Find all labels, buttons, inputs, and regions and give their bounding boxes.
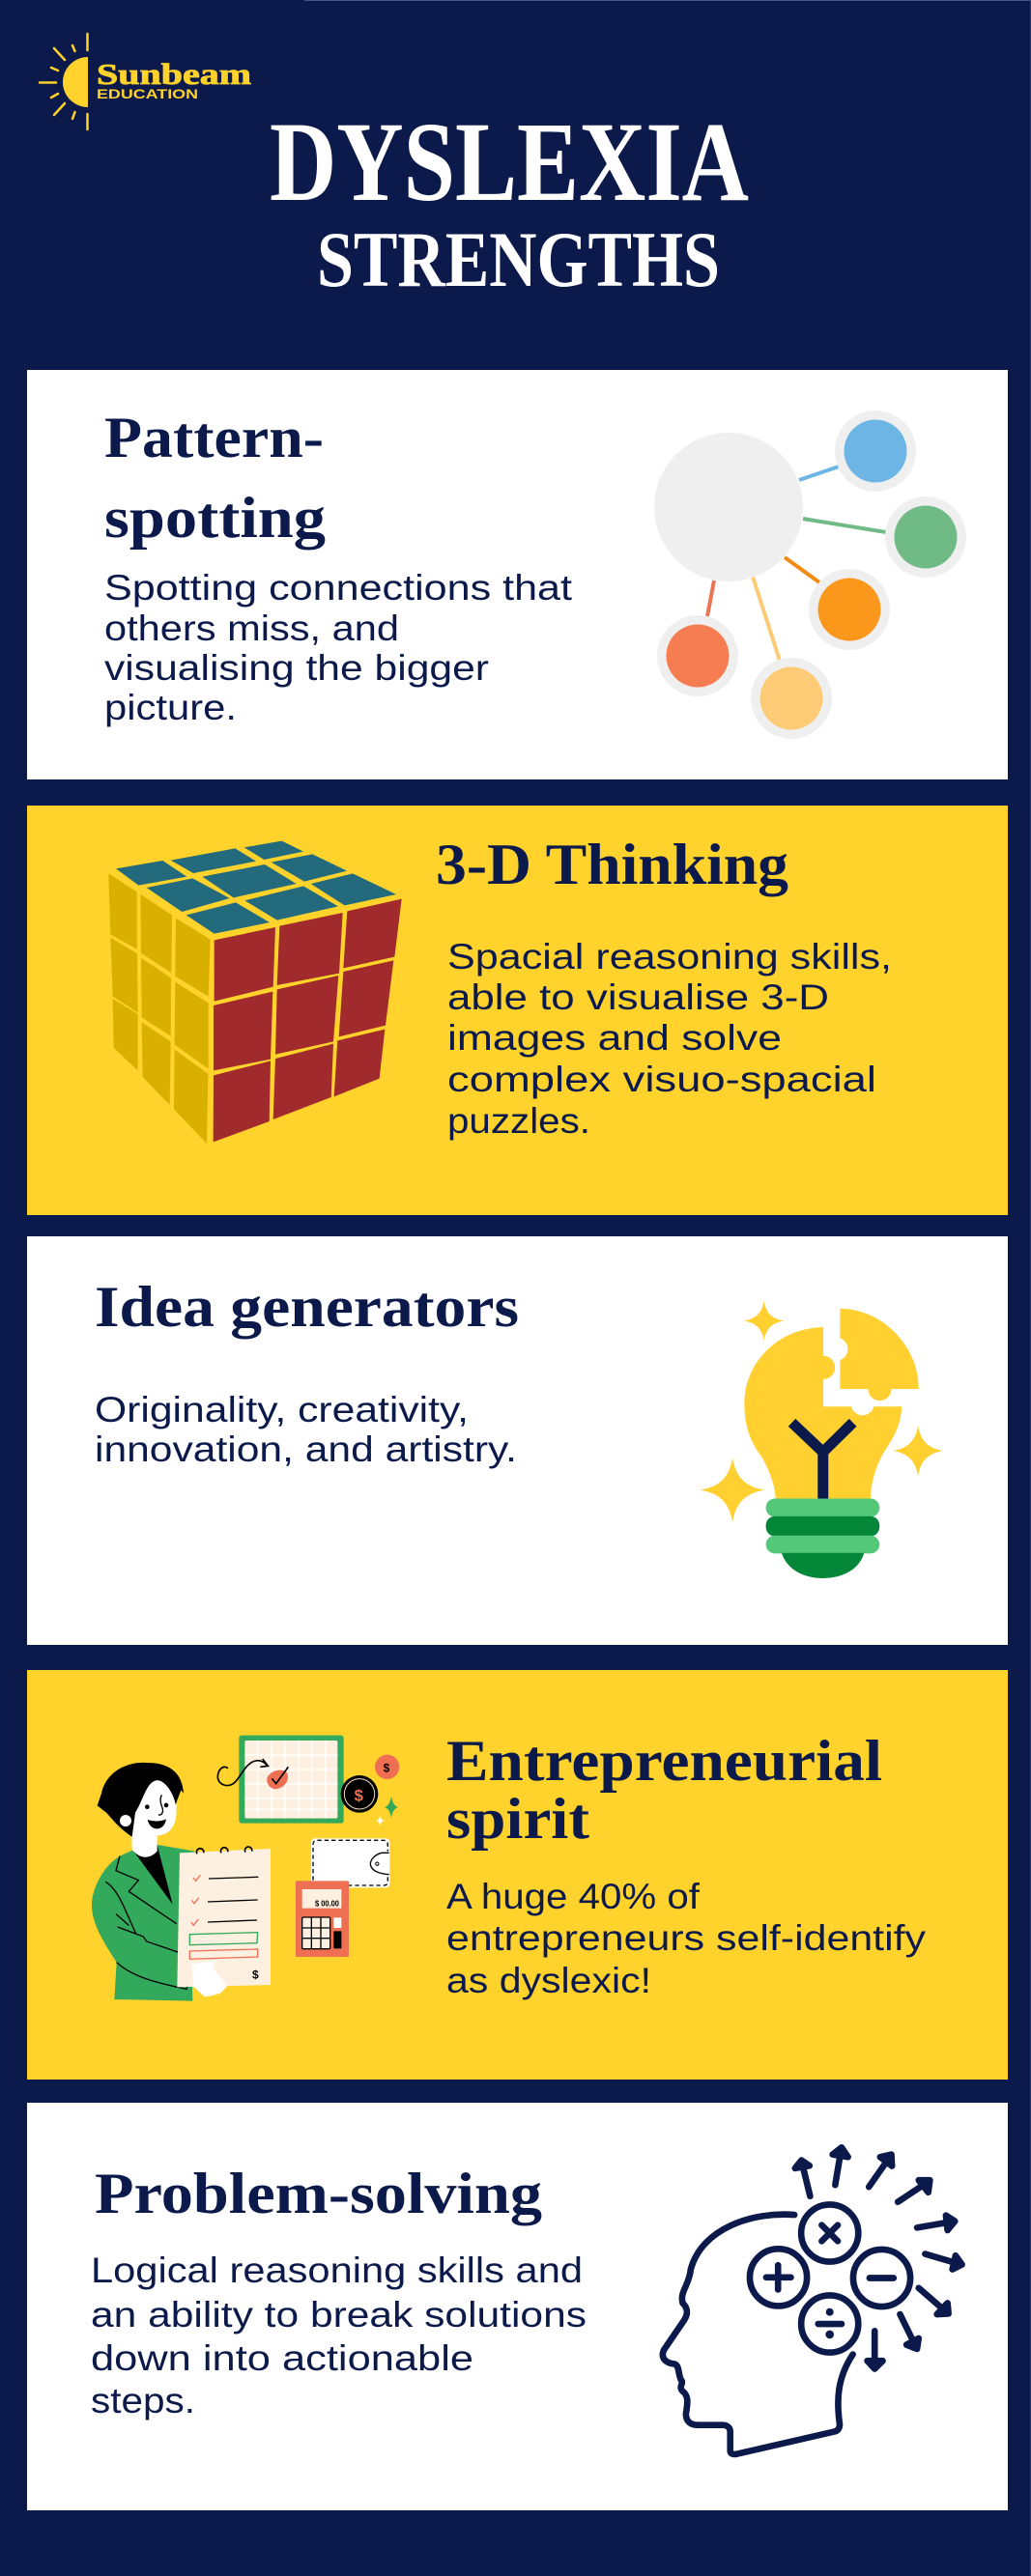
icon: half sun [40,34,88,129]
body text: as dyslexic! [446,1961,651,2000]
body text: A huge 40% of [446,1877,701,1916]
body text: entrepreneurs self-identify [446,1918,927,1958]
heading: spotting [104,486,326,550]
logo: Sunbeam Education [40,34,251,129]
body text: innovation, and artistry. [95,1430,517,1469]
panel: 3-D thinking [27,806,1008,1215]
panel background [27,2103,1008,2510]
chart board [217,1736,344,1824]
coins and sparkles [341,1755,399,1826]
calculator: $ 00.00 [315,1898,339,1908]
heading: 3-D Thinking [436,833,788,896]
panel background [27,1236,1008,1645]
calculator [296,1881,349,1957]
head outline [663,2215,853,2454]
heading: Problem-solving [95,2162,542,2225]
body text: able to visualise 3-D [447,977,829,1017]
heading: Entrepreneurial [446,1729,882,1793]
body text: visualising the bigger [104,648,489,688]
panel: idea generators [27,1236,1008,1645]
heading [104,406,326,550]
title line 2: STRENGTHS [317,215,720,303]
icon: cube [108,841,402,1144]
body text: complex visuo-spacial [447,1060,876,1099]
icon: head with maths symbols and arrows [663,2147,962,2454]
heading: Pattern- [104,406,324,469]
body text: others miss, and [104,609,399,648]
body text [104,568,573,727]
person [92,1763,195,2001]
illustration: entrepreneur with finance items [92,1736,399,2001]
maths symbols [750,2204,910,2353]
panel: problem-solving [27,2103,1008,2510]
coins and sparkles: $ [384,1762,390,1775]
body text: steps. [91,2381,195,2420]
body text: puzzles. [447,1101,590,1141]
body text [95,1390,517,1469]
panel: entrepreneurial spirit [27,1670,1008,2080]
body text: picture. [104,688,237,727]
heading [446,1729,882,1851]
body text: Logical reasoning skills and [91,2250,583,2290]
notepad: $ [252,1968,259,1982]
heading: Idea generators [95,1275,519,1339]
panel: pattern-spotting [27,370,1008,779]
body text: Spotting connections that [104,568,573,608]
panel background [27,1670,1008,2080]
icon: connected circles network [654,410,966,739]
body text: Spacial reasoning skills, [447,937,892,977]
body text: images and solve [447,1018,782,1058]
body text [446,1877,927,2000]
logo wordmark: Sunbeam [97,57,251,91]
icon: puzzle light bulb [701,1301,943,1578]
panel background [27,806,1008,1215]
title [270,99,749,303]
heading: spirit [446,1787,589,1851]
body text: down into actionable [91,2338,473,2378]
body text [447,937,892,1141]
body text: Originality, creativity, [95,1390,469,1430]
coins and sparkles: $ [355,1786,364,1804]
title line 1: DYSLEXIA [270,99,749,225]
body text: an ability to break solutions [91,2295,587,2335]
panel background [27,370,1008,779]
notepad [177,1847,271,1996]
logo subtitle: EDUCATION [97,86,198,101]
wallet [311,1838,389,1887]
body text [91,2250,587,2420]
arrows [795,2147,962,2369]
